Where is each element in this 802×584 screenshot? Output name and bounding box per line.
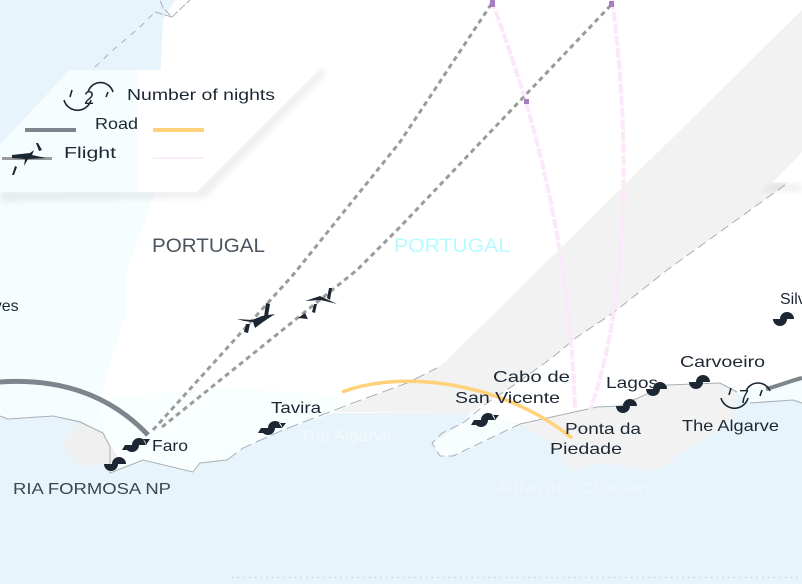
marker and label: Carvoeiro <box>680 354 765 389</box>
pale coastal shelf south <box>100 388 353 472</box>
legend label nights: Number of nights <box>127 87 275 104</box>
nights badge and label: The Algarve: 7 <box>739 387 749 407</box>
marker and label: Tavira: Tavira <box>271 400 321 417</box>
label: pale south: Atlantic Ocean <box>497 480 650 497</box>
plane icon 1 <box>237 303 275 333</box>
marker and label: Faro <box>122 438 188 455</box>
legend plane icon <box>12 143 46 175</box>
legend road swatch grey <box>25 128 76 132</box>
legend nights badge <box>64 83 113 110</box>
label: PORTUGAL dark: PORTUGAL <box>152 236 265 257</box>
pale coastal shelf east <box>737 378 802 403</box>
marker and label: Cabo de San Vicente: Cabo de <box>493 369 570 386</box>
plane icon 2 <box>298 288 337 319</box>
marker and label: Cabo de San Vicente <box>455 369 570 427</box>
marker and label: Ria Formosa NP: RIA FORMOSA NP <box>13 481 171 498</box>
flight route grey 2 <box>162 4 612 427</box>
legend flight swatch pink <box>153 157 204 159</box>
nights badge and label: The Algarve <box>682 383 779 435</box>
label: Ponta da Piedade <box>550 421 641 458</box>
pale coastal shelf cape <box>433 413 520 456</box>
marker and label: Tavira <box>258 400 321 435</box>
land: grey southern headland <box>520 383 737 470</box>
road route west <box>0 381 148 435</box>
label: The Algarve pale: The Algarve <box>300 428 392 445</box>
nights badge and label: The Algarve: The Algarve <box>682 418 779 435</box>
land: grey region band <box>333 10 802 413</box>
legend nights badge: 2 <box>84 88 94 108</box>
marker and label: Lagos: Lagos <box>606 375 658 392</box>
marker and label: Ria Formosa NP <box>13 457 171 498</box>
land: grey western headland <box>63 420 122 465</box>
marker and label: Silves <box>773 291 802 326</box>
legend panel right wrap <box>760 152 802 192</box>
road route yellow <box>342 381 572 438</box>
flight route grey 1 <box>153 3 492 430</box>
land: white mainland <box>100 0 802 473</box>
flight accents <box>490 0 614 104</box>
flight route pink 1 <box>491 0 575 410</box>
legend flight swatch grey <box>2 157 52 160</box>
marker and label: Lagos <box>606 375 667 396</box>
marker and label: Cabo de San Vicente: San Vicente <box>455 390 560 407</box>
marker and label: Carvoeiro: Carvoeiro <box>680 354 765 371</box>
legend label flight: Flight <box>64 145 117 162</box>
dotted bottom strip <box>232 576 802 578</box>
legend road swatch yellow <box>153 128 204 132</box>
marker: Ponta da Piedade <box>616 399 637 413</box>
road route east <box>766 378 802 389</box>
legend label road: Road <box>95 116 138 133</box>
legend panel <box>0 68 328 202</box>
label: Ponta da Piedade: Piedade <box>550 441 622 458</box>
label: Ponta da Piedade: Ponta da <box>565 421 641 438</box>
label: PORTUGAL cyan: PORTUGAL <box>394 236 510 257</box>
marker and label: Faro: Faro <box>152 438 188 455</box>
pale coastal shelf west <box>0 70 160 465</box>
legend shadow <box>0 68 328 202</box>
flight route pink 2 <box>590 0 624 410</box>
